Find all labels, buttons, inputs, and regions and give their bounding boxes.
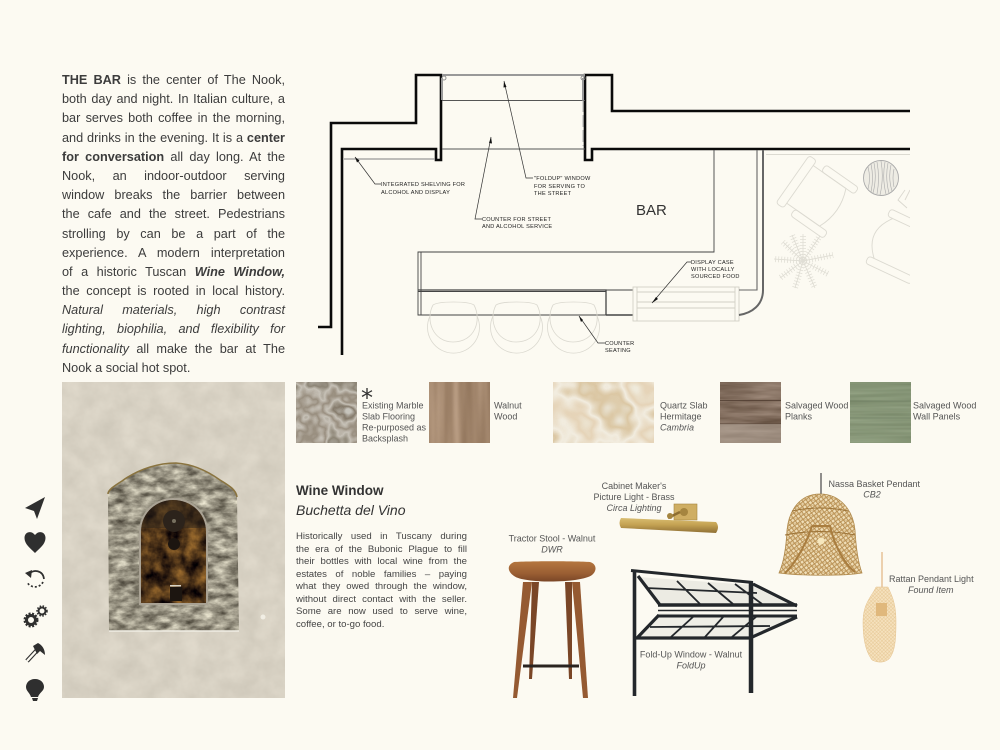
caption: marble: Existing Marble <box>362 400 424 410</box>
wine window text: Buchetta del Vino <box>296 502 406 518</box>
note: seating: SEATING <box>605 348 631 354</box>
icon: gears <box>24 606 47 626</box>
material swatches <box>296 382 976 444</box>
intro text: Nook, an indoor-outdoor serving <box>62 169 285 183</box>
caption: panels: Wall Panels <box>913 412 961 422</box>
wine window text: their bottles with local wine from the <box>296 556 467 567</box>
caption: panels: Salvaged Wood <box>913 400 976 410</box>
intro text: functionality all make the bar at The <box>62 342 285 356</box>
intro text: strolling by can be a part of the <box>62 226 285 240</box>
sidebar icons <box>24 497 47 701</box>
intro text: of a historic Tuscan Wine Window, <box>62 265 285 279</box>
exterior walls <box>318 75 910 355</box>
room label: BAR <box>636 202 667 219</box>
caption: planks: Planks <box>785 412 813 422</box>
note: counter: AND ALCOHOL SERVICE <box>482 224 552 230</box>
caption: fold-up window: FoldUp <box>676 660 706 670</box>
note: shelving: INTEGRATED SHELVING FOR <box>381 182 465 188</box>
right partition <box>739 150 763 315</box>
caption: basket pendant: Nassa Basket Pendant <box>828 479 921 489</box>
wine window text: the era of the Bubonic Plague to fill <box>296 544 467 555</box>
caption: stool: Tractor Stool - Walnut <box>509 534 595 544</box>
stone surround <box>105 460 241 634</box>
icon: navigation arrow <box>25 497 45 519</box>
furniture lounge <box>766 154 910 288</box>
caption: rattan pendant: Found Item <box>908 585 954 595</box>
caption: walnut: Wood <box>494 412 517 422</box>
dark niche door <box>140 498 208 604</box>
display case <box>633 287 739 321</box>
product: basket pendant <box>779 473 862 575</box>
icon: heart <box>24 532 46 553</box>
swatch: marble <box>296 382 357 443</box>
note: counter: COUNTER FOR STREET <box>482 217 551 223</box>
intro text: window breaks the barrier between <box>62 188 285 202</box>
wine window text: Some are now used to serve wine, <box>296 606 467 617</box>
intro text: the cafe and the street. Pedestrians <box>62 207 285 221</box>
arrowheads <box>355 81 658 322</box>
note: fold-up window: THE STREET <box>534 191 572 197</box>
wine window text: estates of noble families – paying <box>296 569 467 580</box>
photo: wine window <box>62 382 285 698</box>
wine window text: Wine Window <box>296 483 384 498</box>
swatch: quartz <box>553 382 654 443</box>
icon: hammer <box>27 643 45 661</box>
fold-up window and counter lines <box>442 75 585 149</box>
wine window text <box>296 483 467 630</box>
note: display case: WITH LOCALLY <box>691 267 735 273</box>
caption: rattan pendant: Rattan Pendant Light <box>889 574 974 584</box>
product: fold-up window <box>631 570 797 696</box>
upper glass <box>638 577 795 605</box>
intro text <box>62 73 286 375</box>
caption: picture light: Circa Lighting <box>606 503 662 513</box>
plant <box>774 234 833 288</box>
shelving line <box>344 158 435 160</box>
leader lines <box>355 81 691 343</box>
icon: refresh <box>25 570 44 587</box>
intro text: Natural materials, high contrast <box>62 303 285 317</box>
note: seating: COUNTER <box>605 341 634 347</box>
intro text: Nook a social hot spot. <box>62 361 190 375</box>
intro text: and drinks in the evening. It is a center <box>62 131 285 145</box>
wine window text: Historically used in Tuscany during <box>296 531 467 542</box>
note: fold-up window: FOR SERVING TO <box>534 184 585 190</box>
swatch: green panels <box>850 382 911 443</box>
caption: picture light: Picture Light - Brass <box>593 492 675 502</box>
wine window text: what they owed through the window, <box>296 581 467 592</box>
swatch: planks <box>720 382 781 443</box>
product: picture light <box>620 504 718 533</box>
intro text: THE BAR is the center of The Nook, <box>62 73 285 87</box>
asterisk: * <box>361 384 373 412</box>
caption: marble: Re-purposed as <box>362 422 427 432</box>
lounge chair right <box>866 210 910 284</box>
intro text: both day and night. In Italian culture, a <box>62 92 285 106</box>
caption: marble: Backsplash <box>362 434 408 444</box>
intro text: for conversation all day long. At the <box>62 150 285 164</box>
side table <box>864 160 898 196</box>
wine window text: coffee, or to-go food. <box>296 619 384 630</box>
caption: stool: DWR <box>541 544 563 554</box>
plan annotations <box>355 81 740 354</box>
bar counter <box>418 150 714 315</box>
intro text: bar serves both coffee in the morning, <box>62 111 285 125</box>
caption: marble: Slab Flooring <box>362 412 415 422</box>
lower glass <box>638 613 795 637</box>
note: display case: DISPLAY CASE <box>691 260 734 266</box>
note: fold-up window: "FOLDUP" WINDOW <box>534 176 591 182</box>
note: shelving: ALCOHOL AND DISPLAY <box>381 190 450 196</box>
lounge chair <box>775 154 859 238</box>
counter stools <box>428 302 600 353</box>
swatch: walnut <box>429 382 490 443</box>
caption: quartz: Cambria <box>660 422 694 432</box>
caption: walnut: Walnut <box>494 400 522 410</box>
product: rattan pendant <box>863 552 896 662</box>
note: display case: SOURCED FOOD <box>691 274 740 280</box>
wine window text: without direct contact with the seller. <box>296 594 467 605</box>
caption: quartz: Quartz Slab <box>660 400 708 410</box>
intro text: lighting, biophilia, and flexibility for <box>62 322 285 336</box>
caption: picture light: Cabinet Maker's <box>602 481 666 491</box>
product: tractor stool <box>509 561 596 698</box>
caption: fold-up window: Fold-Up Window - Walnut <box>640 650 742 660</box>
caption: CB2: CB2 <box>863 490 881 500</box>
icon: light bulb <box>26 679 44 701</box>
floor plan <box>318 75 936 355</box>
caption: planks: Salvaged Wood <box>785 400 848 410</box>
intro text: experience. A modern interpretation <box>62 246 285 260</box>
caption: quartz: Hermitage <box>660 412 702 422</box>
intro text: the concept is rooted in local history. <box>62 284 285 298</box>
